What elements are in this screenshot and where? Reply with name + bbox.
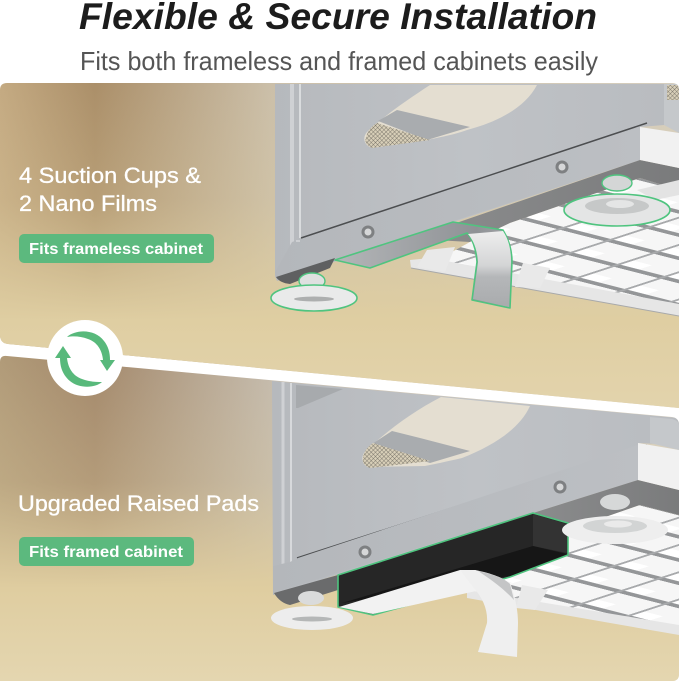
shadow under frame: [276, 258, 335, 284]
subtitle: Fits both frameless and framed cabinets easily: [80, 46, 598, 76]
right side box: [640, 127, 679, 168]
suction cup, left: [271, 591, 353, 630]
raised pad with green outline: [338, 513, 568, 615]
suction cup, right: [562, 494, 668, 544]
screws: [358, 546, 372, 558]
drawer window with mesh: [364, 85, 537, 148]
screws: [362, 226, 374, 238]
drawer frame, top: [275, 84, 679, 316]
icon: swap arrows in white circle: [47, 320, 123, 396]
badge: fits framed cabinet: Fits framed cabinet: [29, 544, 184, 561]
nano film tape with green outline: [335, 222, 512, 308]
clip: [516, 585, 548, 610]
label: suction cups: 2 Nano Films: [19, 191, 157, 216]
badge: fits frameless cabinet: [19, 234, 214, 263]
suction cup, right: [564, 175, 670, 226]
badge: fits frameless cabinet: Fits frameless cabinet: [29, 241, 204, 258]
label: raised pads: Upgraded Raised Pads: [18, 491, 259, 516]
panel: frameless installation: [0, 83, 679, 413]
panel: framed installation: [0, 350, 679, 681]
label: suction cups: [19, 166, 201, 212]
wire grid: [449, 178, 679, 304]
drawer window with mesh: [362, 397, 530, 467]
suction cup, left: [271, 273, 357, 311]
drawer frame, bottom: [272, 381, 679, 635]
clips: [422, 247, 455, 262]
right side box: [638, 443, 679, 490]
shadow under frame: [274, 575, 338, 605]
badge: fits framed cabinet: [19, 537, 194, 566]
label: suction cups: 4 Suction Cups &: [19, 163, 201, 188]
white adhesive tape strip: [475, 570, 518, 657]
wire grid: [467, 505, 679, 628]
